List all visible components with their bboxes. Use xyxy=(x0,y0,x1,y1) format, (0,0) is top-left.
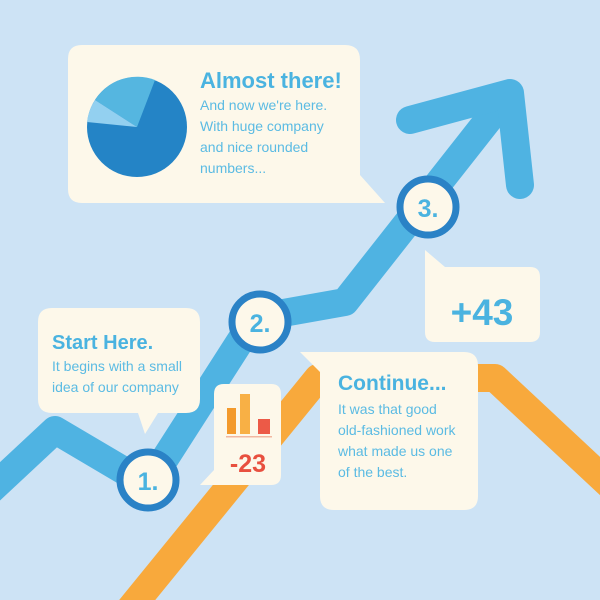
panel: start here: Start Here. xyxy=(52,332,153,354)
step circle 1: 1. xyxy=(138,468,158,496)
panel: continue: It was that good xyxy=(338,401,437,417)
panel: -23 bar chart: -23 xyxy=(230,450,266,478)
text block: numbers... xyxy=(200,160,266,176)
panel: almost there xyxy=(68,45,385,203)
step circle 2: 2. xyxy=(250,310,270,338)
panel: continue xyxy=(300,352,478,510)
step circle 3: 3. xyxy=(418,195,438,223)
orange trend line xyxy=(125,378,600,600)
panel: -23 bar chart xyxy=(200,384,281,485)
text block: and nice rounded xyxy=(200,139,308,155)
pie chart xyxy=(87,77,187,177)
heading: Almost there! xyxy=(200,68,342,93)
text block: And now we're here. xyxy=(200,97,327,113)
blue trend line with arrow xyxy=(0,93,520,500)
panel: start here: idea of our company xyxy=(52,379,179,395)
panel: +43 xyxy=(425,250,540,342)
step circle 2 xyxy=(232,294,288,350)
panel: start here xyxy=(38,308,200,434)
step circle 1 xyxy=(120,452,176,508)
panel: +43: +43 xyxy=(451,292,513,333)
step circle 3 xyxy=(400,179,456,235)
panel: continue: old-fashioned work xyxy=(338,422,457,438)
text block: With huge company xyxy=(200,118,324,134)
panel: continue: of the best. xyxy=(338,464,407,480)
panel: continue: Continue... xyxy=(338,372,446,395)
panel: start here: It begins with a small xyxy=(52,358,182,374)
panel: continue: what made us one xyxy=(337,443,453,459)
